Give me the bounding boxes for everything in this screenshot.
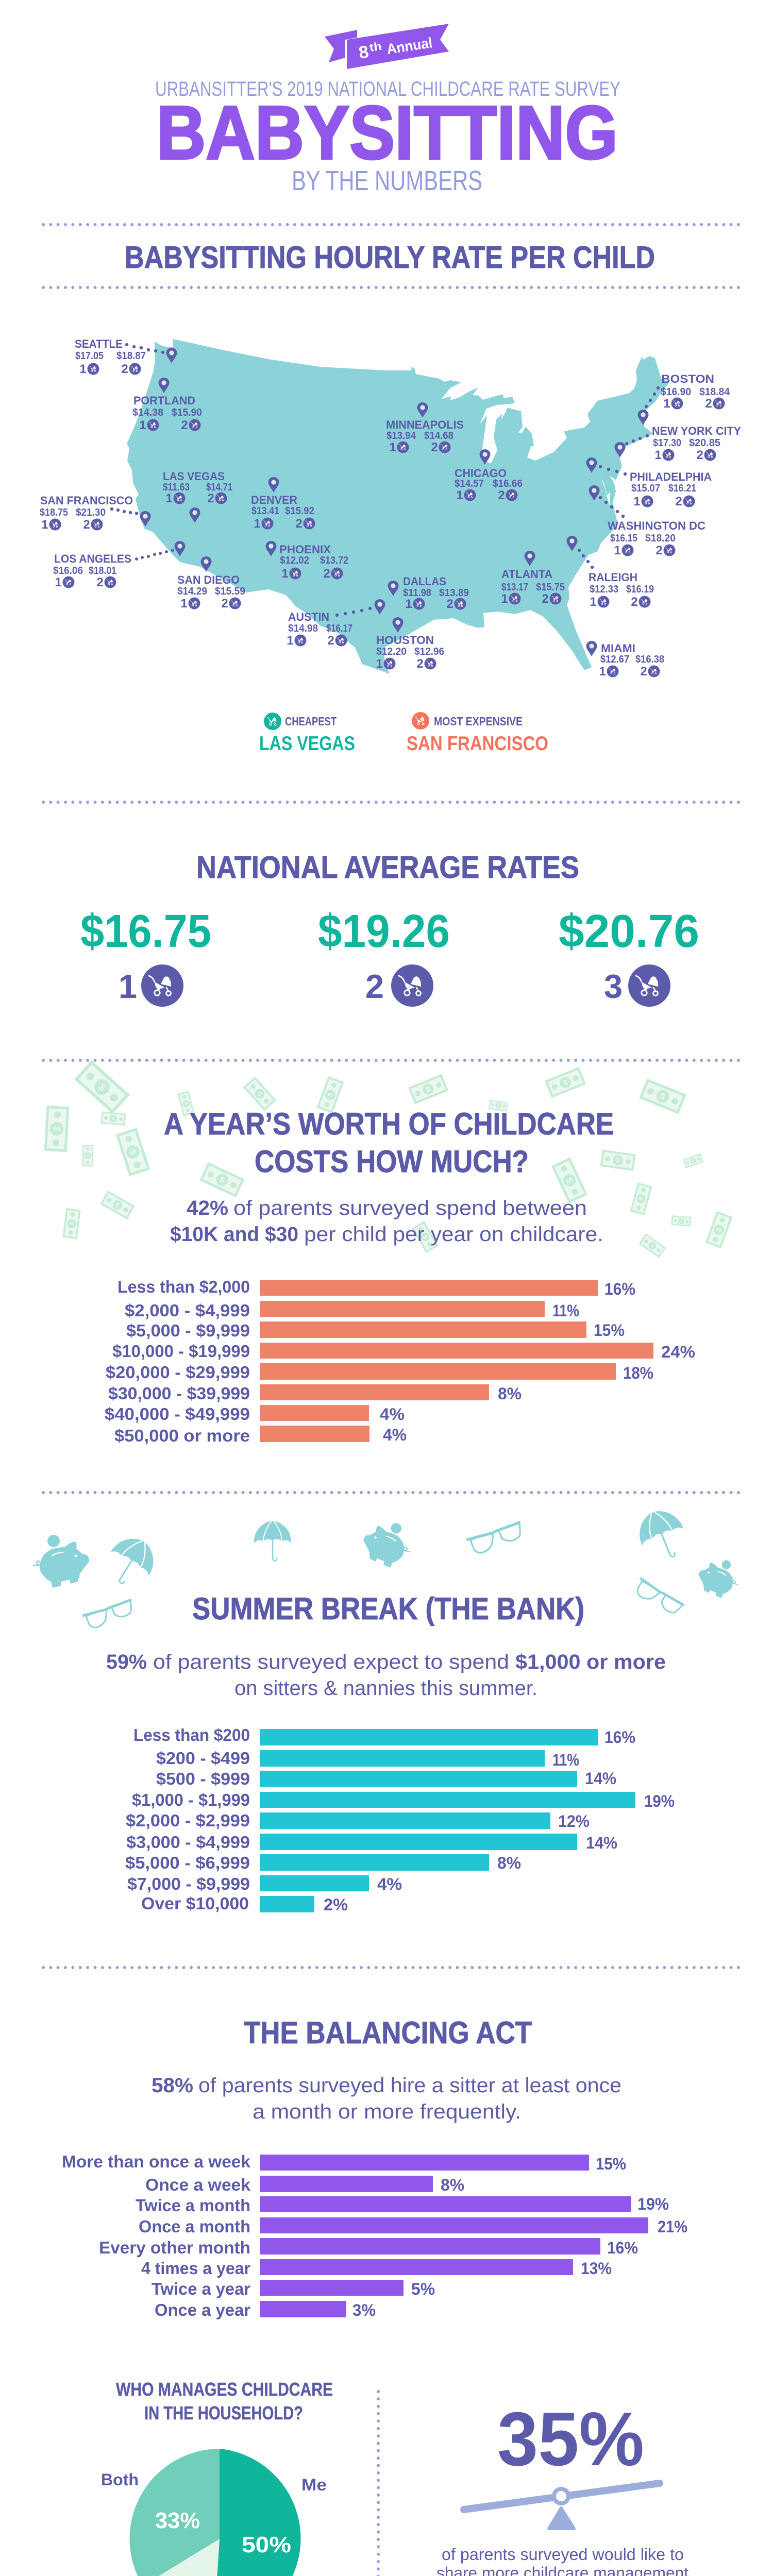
pie chart: who manages childcare bbox=[74, 2449, 327, 2576]
city: Miami: MIAMI bbox=[601, 642, 635, 655]
subtitle: URBANSITTER'S 2019 NATIONAL CHILDCARE RATE SURVEY bbox=[155, 78, 620, 100]
bar chart: yearly childcare costs: $50,000 or more bbox=[114, 1426, 250, 1445]
pie chart: who manages childcare: 33% bbox=[155, 2508, 200, 2533]
city: Seattle: $18.87 bbox=[116, 350, 146, 362]
city: Phoenix bbox=[266, 541, 348, 581]
city: Minneapolis: MINNEAPOLIS bbox=[386, 418, 464, 431]
city: Houston: 2 bbox=[416, 657, 424, 671]
text: summer spend bbox=[106, 1651, 666, 1700]
city: Austin: AUSTIN bbox=[288, 611, 329, 623]
bar chart: summer spend: 8% bbox=[497, 1854, 521, 1872]
city: Chicago: $14.57 bbox=[455, 478, 484, 489]
text: share management: of parents surveyed would like to bbox=[442, 2545, 684, 2564]
bar chart: hiring frequency: Once a week bbox=[145, 2175, 251, 2194]
city: Dallas: DALLAS bbox=[403, 575, 446, 588]
city: Atlanta: ATLANTA bbox=[501, 568, 552, 581]
city: Los Angeles: $18.01 bbox=[89, 565, 116, 577]
city: Raleigh: $12.33 bbox=[590, 584, 618, 595]
city: Denver: 2 bbox=[295, 517, 303, 531]
city: Minneapolis: 1 bbox=[389, 440, 396, 454]
bar chart: summer spend: $500 - $999 bbox=[156, 1769, 250, 1788]
city: Boston: BOSTON bbox=[661, 372, 714, 385]
city: Phoenix: 2 bbox=[323, 567, 330, 581]
city: Dallas bbox=[388, 575, 469, 611]
text: summer spend: 59% bbox=[106, 1651, 147, 1673]
bar chart: yearly childcare costs: 18% bbox=[623, 1364, 653, 1382]
text: share management bbox=[436, 2545, 688, 2576]
text: summer spend: on sitters & nannies this summer. bbox=[234, 1677, 537, 1700]
bar chart: yearly childcare costs: $30,000 - $39,999 bbox=[108, 1384, 250, 1403]
city: Houston: HOUSTON bbox=[376, 634, 434, 647]
heading: hourly rate: BABYSITTING HOURLY RATE PER CHILD bbox=[125, 240, 655, 275]
bar chart: summer spend: 14% bbox=[585, 1769, 616, 1788]
bar chart: yearly childcare costs: 8% bbox=[498, 1384, 522, 1403]
city: Houston: $12.20 bbox=[376, 646, 407, 657]
heading: the balancing act: THE BALANCING ACT bbox=[244, 2015, 532, 2050]
bar chart: yearly childcare costs bbox=[105, 1277, 695, 1445]
city: Phoenix: $12.02 bbox=[280, 555, 309, 566]
heading: summer break: SUMMER BREAK (THE BANK) bbox=[192, 1591, 584, 1626]
bar chart: summer spend: 4% bbox=[377, 1875, 402, 1893]
city: New York City: 1 bbox=[654, 448, 662, 462]
bar chart: yearly childcare costs: 24% bbox=[661, 1343, 695, 1361]
heading: who manages childcare: WHO MANAGES CHILDCARE bbox=[116, 2379, 333, 2400]
city: Atlanta: 2 bbox=[542, 592, 549, 606]
city: Atlanta: 1 bbox=[501, 592, 508, 606]
city: Seattle: SEATTLE bbox=[75, 337, 123, 350]
city: San Diego: $15.59 bbox=[215, 586, 245, 597]
city: Los Angeles: 1 bbox=[55, 575, 62, 589]
bar chart: hiring frequency: 5% bbox=[411, 2280, 435, 2298]
rate: two children bbox=[318, 906, 450, 1007]
city: San Francisco: 1 bbox=[41, 518, 48, 532]
bar chart: summer spend: $7,000 - $9,999 bbox=[127, 1874, 250, 1893]
legend: cheapest: LAS VEGAS bbox=[259, 733, 355, 755]
city: Chicago: 1 bbox=[456, 488, 463, 502]
map of the USA bbox=[127, 339, 669, 674]
text: childcare spend bbox=[170, 1197, 603, 1246]
city: Boston: 2 bbox=[705, 397, 712, 411]
bar chart: hiring frequency: Every other month bbox=[99, 2238, 250, 2257]
heading: a year's worth: COSTS HOW MUCH? bbox=[255, 1144, 529, 1179]
bar chart: hiring frequency: 8% bbox=[441, 2176, 464, 2194]
city: Miami: $16.38 bbox=[635, 654, 664, 665]
ribbon: 8th annual bbox=[325, 24, 449, 69]
city: Portland: $14.38 bbox=[132, 407, 163, 418]
text: hiring frequency: a month or more frequently. bbox=[253, 2100, 521, 2123]
city: Washington DC: $16.15 bbox=[610, 533, 637, 544]
decoration: falling money bbox=[44, 1060, 732, 1258]
bar chart: hiring frequency: Once a year bbox=[155, 2300, 250, 2319]
city: Los Angeles: LOS ANGELES bbox=[54, 552, 131, 565]
city: Seattle bbox=[75, 337, 177, 376]
city: Boston: $18.84 bbox=[699, 386, 730, 398]
city: Raleigh: 1 bbox=[590, 595, 597, 609]
city: Washington DC: 1 bbox=[614, 544, 621, 557]
bar chart: yearly childcare costs: 4% bbox=[380, 1405, 405, 1423]
city: Boston: 1 bbox=[663, 397, 670, 411]
bar chart: yearly childcare costs: Less than $2,000 bbox=[117, 1277, 250, 1296]
heading: national average rates: NATIONAL AVERAGE RATES bbox=[196, 850, 579, 885]
city: Denver: $13.41 bbox=[251, 505, 279, 517]
city: Philadelphia: 1 bbox=[633, 495, 641, 509]
bar chart: summer spend bbox=[125, 1725, 675, 1914]
bar chart: hiring frequency: 13% bbox=[581, 2259, 612, 2278]
rate: one child bbox=[80, 906, 211, 1007]
city: Denver: DENVER bbox=[251, 494, 297, 506]
city: Houston: 1 bbox=[376, 657, 383, 671]
icon: seesaw bbox=[464, 2483, 660, 2529]
city: San Diego: SAN DIEGO bbox=[177, 573, 240, 586]
bar chart: hiring frequency bbox=[62, 2152, 687, 2319]
bar chart: summer spend: 19% bbox=[644, 1792, 675, 1810]
city: San Francisco bbox=[40, 494, 150, 532]
city: New York City bbox=[614, 425, 741, 462]
city: New York City: $17.30 bbox=[653, 437, 681, 449]
city: New York City: 2 bbox=[696, 448, 703, 462]
city: San Diego: 1 bbox=[180, 597, 188, 611]
city: Chicago: $16.66 bbox=[493, 478, 523, 489]
city: Minneapolis: $13.94 bbox=[386, 430, 416, 442]
city: Austin bbox=[287, 599, 385, 648]
bar chart: yearly childcare costs: 16% bbox=[604, 1280, 635, 1298]
city: Phoenix: 1 bbox=[281, 567, 289, 581]
city: Denver: 1 bbox=[254, 517, 261, 531]
heading: a year's worth bbox=[164, 1107, 614, 1179]
city: Portland: 1 bbox=[139, 418, 146, 432]
city: Atlanta bbox=[501, 551, 565, 606]
subtitle: by the numbers: BY THE NUMBERS bbox=[292, 165, 482, 196]
city: Las Vegas: $11.63 bbox=[163, 482, 190, 493]
bar chart: summer spend: $5,000 - $6,999 bbox=[125, 1853, 250, 1872]
city: Phoenix: $13.72 bbox=[320, 555, 348, 566]
text: hiring frequency bbox=[152, 2074, 621, 2123]
city: Austin: $16.17 bbox=[326, 623, 352, 634]
bar chart: yearly childcare costs: $40,000 - $49,999 bbox=[105, 1404, 250, 1423]
city: Washington DC: WASHINGTON DC bbox=[608, 519, 705, 532]
city: Miami bbox=[586, 641, 664, 679]
text: summer spend: of parents surveyed expect to spend bbox=[153, 1651, 509, 1673]
header bbox=[155, 24, 620, 196]
text: childcare spend: of parents surveyed spend between bbox=[233, 1197, 587, 1219]
bar chart: summer spend: $1,000 - $1,999 bbox=[132, 1790, 250, 1809]
stat: 35 percent: 35% bbox=[497, 2397, 644, 2482]
heading: who manages childcare: IN THE HOUSEHOLD? bbox=[144, 2402, 303, 2424]
city: Denver bbox=[251, 477, 315, 531]
city: Raleigh: $16.19 bbox=[626, 584, 654, 595]
bar chart: hiring frequency: Twice a month bbox=[136, 2196, 250, 2215]
pie chart: who manages childcare: 50% bbox=[242, 2532, 291, 2557]
rate: two children: $19.26 bbox=[318, 906, 450, 957]
city: Minneapolis: 2 bbox=[431, 440, 438, 454]
bar chart: yearly childcare costs: 15% bbox=[594, 1321, 625, 1340]
city: New York City: NEW YORK CITY bbox=[652, 425, 741, 437]
city: San Diego bbox=[177, 556, 245, 611]
text: summer spend: $1,000 or more bbox=[515, 1651, 666, 1673]
city: Boston bbox=[638, 372, 730, 425]
rate: one child: $16.75 bbox=[80, 906, 211, 957]
city: Washington DC: $18.20 bbox=[645, 533, 676, 544]
city: San Diego: 2 bbox=[221, 597, 228, 611]
city: San Francisco: $21.30 bbox=[76, 507, 106, 518]
city: Dallas: 2 bbox=[446, 597, 453, 611]
bar chart: yearly childcare costs: 4% bbox=[383, 1426, 407, 1444]
legend: cheapest bbox=[259, 713, 355, 755]
text: childcare spend: per child per year on childcare. bbox=[304, 1223, 603, 1246]
legend: most expensive: MOST EXPENSIVE bbox=[434, 715, 523, 728]
bar chart: summer spend: 14% bbox=[586, 1834, 617, 1852]
city: Washington DC: 2 bbox=[656, 544, 663, 557]
text: hiring frequency: 58% bbox=[152, 2074, 193, 2097]
rate: one child: 1 bbox=[119, 968, 137, 1005]
city: Philadelphia: 2 bbox=[675, 495, 682, 509]
ribbon: 8th annual: th bbox=[368, 40, 382, 54]
city: Austin: 1 bbox=[287, 634, 294, 648]
city: Seattle: $17.05 bbox=[75, 350, 104, 362]
bar chart: summer spend: Over $10,000 bbox=[141, 1894, 249, 1913]
city: Seattle: 1 bbox=[79, 362, 87, 376]
city: Atlanta: $15.75 bbox=[536, 582, 565, 593]
city: Philadelphia bbox=[586, 457, 712, 509]
city: Raleigh: RALEIGH bbox=[589, 571, 637, 584]
city: Miami: 1 bbox=[599, 665, 606, 679]
city: Minneapolis bbox=[386, 402, 464, 454]
heading: a year's worth: A YEAR’S WORTH OF CHILDCARE bbox=[164, 1107, 614, 1141]
bar chart: hiring frequency: 3% bbox=[352, 2301, 376, 2319]
pie chart: who manages childcare: Both bbox=[101, 2470, 139, 2489]
city: Austin: $14.98 bbox=[288, 623, 318, 634]
city: Miami: 2 bbox=[640, 665, 647, 679]
city: Los Angeles: $16.06 bbox=[53, 565, 83, 577]
city: Dallas: $13.89 bbox=[439, 587, 469, 599]
city: Houston: $12.96 bbox=[414, 646, 444, 657]
city: Las Vegas: 2 bbox=[207, 492, 214, 505]
bar chart: hiring frequency: Once a month bbox=[139, 2217, 250, 2236]
bar chart: yearly childcare costs: 11% bbox=[552, 1301, 579, 1320]
city: Washington DC bbox=[589, 485, 705, 557]
city: Houston bbox=[376, 617, 444, 671]
rate: three children: 3 bbox=[604, 968, 623, 1005]
bar chart: hiring frequency: More than once a week bbox=[62, 2152, 251, 2171]
legend: most expensive: SAN FRANCISCO bbox=[407, 733, 548, 755]
city: San Francisco: SAN FRANCISCO bbox=[40, 494, 133, 507]
bar chart: yearly childcare costs: $10,000 - $19,999 bbox=[112, 1342, 250, 1361]
city: Las Vegas bbox=[163, 470, 232, 523]
city: Austin: 2 bbox=[327, 634, 334, 648]
decoration: piggy banks, umbrellas, glasses bbox=[33, 1504, 742, 1628]
text: childcare spend: 42% bbox=[187, 1197, 228, 1219]
city: Portland: $15.90 bbox=[172, 407, 202, 418]
city: Philadelphia: PHILADELPHIA bbox=[630, 470, 712, 483]
ribbon: 8th annual: Annual bbox=[385, 35, 433, 57]
city: Miami: $12.67 bbox=[600, 654, 629, 665]
bar chart: yearly childcare costs: $2,000 - $4,999 bbox=[125, 1301, 250, 1320]
text: hiring frequency: of parents surveyed hire a sitter at least once bbox=[198, 2074, 621, 2097]
legend: cheapest: CHEAPEST bbox=[285, 715, 337, 728]
bar chart: hiring frequency: Twice a year bbox=[152, 2279, 250, 2298]
city: San Francisco: $18.75 bbox=[40, 507, 68, 518]
bar chart: summer spend: 12% bbox=[558, 1812, 590, 1831]
city: Minneapolis: $14.68 bbox=[424, 430, 453, 442]
legend: most expensive bbox=[407, 712, 548, 755]
bar chart: summer spend: $200 - $499 bbox=[156, 1749, 250, 1768]
bar chart: summer spend: Less than $200 bbox=[133, 1725, 250, 1744]
bar chart: summer spend: $2,000 - $2,999 bbox=[126, 1811, 250, 1830]
city: Seattle: 2 bbox=[121, 362, 128, 376]
pie chart: who manages childcare: Me bbox=[301, 2476, 327, 2494]
city: San Francisco: 2 bbox=[83, 518, 90, 532]
city: Atlanta: $13.17 bbox=[501, 582, 528, 593]
city: Las Vegas: LAS VEGAS bbox=[163, 470, 225, 483]
city: Raleigh: 2 bbox=[631, 595, 638, 609]
bar chart: hiring frequency: 19% bbox=[637, 2195, 669, 2213]
bar chart: hiring frequency: 15% bbox=[596, 2155, 626, 2173]
city: Chicago: 2 bbox=[498, 488, 505, 502]
city: Portland: PORTLAND bbox=[133, 394, 195, 407]
bar chart: yearly childcare costs: $5,000 - $9,999 bbox=[126, 1321, 250, 1340]
city: Raleigh bbox=[567, 536, 654, 609]
bar chart: summer spend: 16% bbox=[604, 1728, 635, 1747]
city: Philadelphia: $16.21 bbox=[668, 483, 696, 494]
rate: three children: $20.76 bbox=[559, 906, 699, 957]
title: BABYSITTING bbox=[157, 91, 618, 175]
city: Los Angeles: 2 bbox=[96, 575, 104, 589]
bar chart: summer spend: 2% bbox=[324, 1895, 348, 1914]
city: Los Angeles bbox=[53, 541, 186, 589]
bar chart: hiring frequency: 16% bbox=[607, 2239, 638, 2257]
city: San Diego: $14.29 bbox=[177, 586, 207, 597]
bar chart: hiring frequency: 4 times a year bbox=[141, 2259, 250, 2278]
rate: three children bbox=[559, 906, 699, 1007]
heading: who manages childcare bbox=[116, 2379, 333, 2424]
city: Dallas: $11.98 bbox=[403, 587, 431, 599]
city: Phoenix: PHOENIX bbox=[279, 543, 331, 556]
city: Denver: $15.92 bbox=[285, 505, 314, 517]
city: Portland bbox=[132, 378, 202, 432]
city: Boston: $16.90 bbox=[661, 386, 691, 398]
city: Las Vegas: $14.71 bbox=[206, 482, 232, 493]
ribbon: 8th annual: 8 bbox=[358, 42, 370, 63]
bar chart: yearly childcare costs: $20,000 - $29,999 bbox=[106, 1363, 250, 1382]
city: New York City: $20.85 bbox=[689, 437, 720, 449]
city: Chicago: CHICAGO bbox=[455, 467, 507, 480]
bar chart: summer spend: 11% bbox=[552, 1751, 579, 1769]
bar chart: hiring frequency: 21% bbox=[658, 2217, 687, 2236]
text: childcare spend: $10K and $30 bbox=[170, 1223, 298, 1246]
city: Las Vegas: 1 bbox=[165, 492, 173, 505]
bar chart: summer spend: $3,000 - $4,999 bbox=[126, 1833, 250, 1852]
city: Portland: 2 bbox=[181, 418, 188, 432]
city: Dallas: 1 bbox=[405, 597, 412, 611]
rate: two children: 2 bbox=[365, 968, 384, 1005]
city: Philadelphia: $15.07 bbox=[631, 483, 660, 494]
city: Chicago bbox=[455, 449, 523, 502]
